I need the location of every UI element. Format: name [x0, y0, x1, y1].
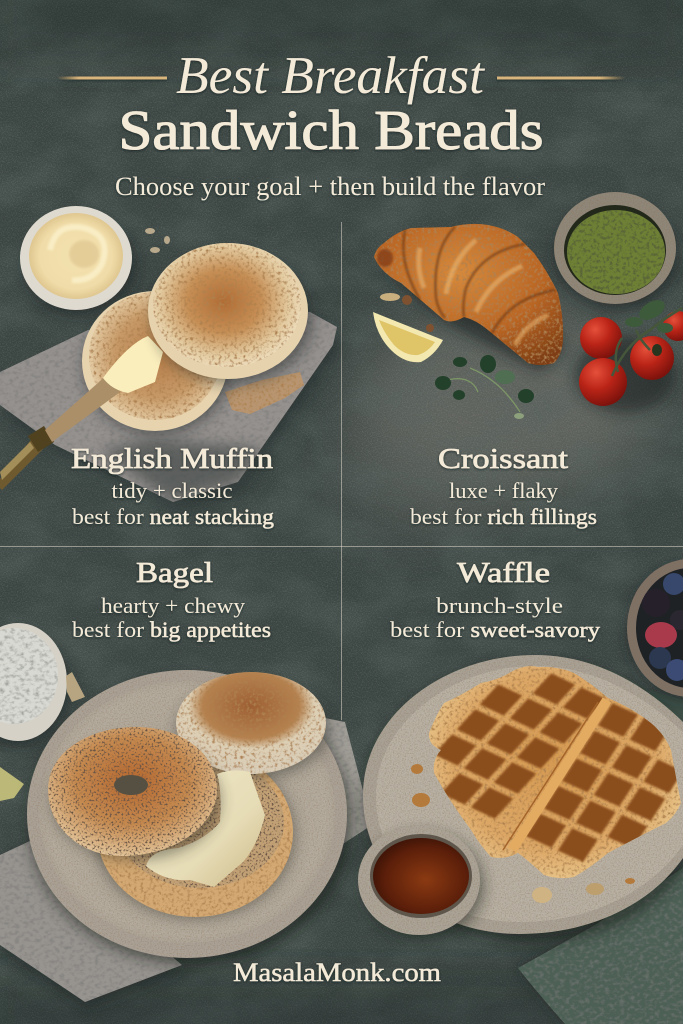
descriptor: tidy + classic: [112, 478, 233, 503]
title line one: Best Breakfast: [176, 47, 485, 105]
icon: cherry tomatoes: [575, 296, 683, 413]
footer: website: MasalaMonk.com: [233, 958, 441, 987]
icon: lemon piece: [0, 767, 24, 801]
icon: crumb: [66, 672, 85, 702]
label: English Muffin: [71, 444, 274, 529]
name: Croissant: [438, 444, 568, 475]
label: Croissant: [410, 444, 597, 529]
icon: butter bowl: [20, 206, 136, 316]
label: Waffle: [390, 558, 600, 642]
icon: butter knife: [0, 374, 120, 490]
napkin: grey linen: [0, 312, 341, 510]
descriptor: hearty + chewy: [101, 593, 245, 618]
icon: berry bowl: [627, 559, 683, 702]
title line two: Sandwich Breads: [118, 100, 544, 162]
icon: crumbs: [145, 228, 170, 253]
icon: waffle: [429, 666, 681, 878]
icon: croissant: [374, 224, 565, 372]
best for: best for neat stacking: [72, 504, 274, 529]
best for: best for big appetites: [72, 617, 271, 642]
icon: everything bagel top: [48, 727, 221, 860]
icon: English muffin half: [176, 672, 329, 778]
name: Bagel: [136, 558, 213, 589]
icon: plate: [363, 655, 683, 942]
icon: bagel bottom half with cream cheese: [95, 747, 295, 919]
best for: best for rich fillings: [410, 504, 597, 529]
name: English Muffin: [71, 444, 273, 475]
ornament: left rule: [57, 76, 167, 80]
napkin: green cloth: [518, 690, 683, 1024]
icon: stoneware plate: [27, 670, 352, 964]
descriptor: brunch-style: [436, 593, 563, 618]
icon: cream cheese: [146, 770, 265, 887]
waffle left half cells: [436, 672, 606, 820]
panel: Waffle: [358, 559, 683, 1024]
icon: crumbs near croissant: [380, 293, 434, 332]
icon: pesto bowl: [554, 192, 678, 311]
title block: [57, 47, 625, 201]
best for: best for sweet-savory: [390, 617, 600, 642]
panel dividers: [0, 222, 683, 720]
waffle right half cells: [526, 702, 677, 863]
label: Bagel: [72, 558, 271, 642]
ornament: right rule: [497, 76, 625, 80]
crumbs on napkin: [225, 372, 304, 414]
icon: microgreens: [435, 355, 534, 419]
icon: syrup bowl: [358, 825, 484, 940]
icon: butter pat: [103, 336, 163, 393]
panel: Croissant: [373, 192, 683, 419]
panel: English Muffin: [0, 206, 341, 510]
napkin: bottom left: [0, 840, 185, 1008]
icon: crumbs on plate: [411, 764, 635, 903]
descriptor: luxe + flaky: [449, 478, 558, 503]
icon: front toasted muffin half: [148, 243, 313, 384]
panel: Bagel: [0, 623, 372, 1008]
icon: lemon wedge: [373, 312, 443, 362]
icon: cottage cheese bowl: [0, 623, 70, 746]
napkin: right side: [240, 718, 372, 918]
icon: back muffin half: [82, 291, 231, 435]
name: Waffle: [457, 558, 550, 589]
subtitle: Choose your goal + then build the flavor: [115, 172, 545, 201]
